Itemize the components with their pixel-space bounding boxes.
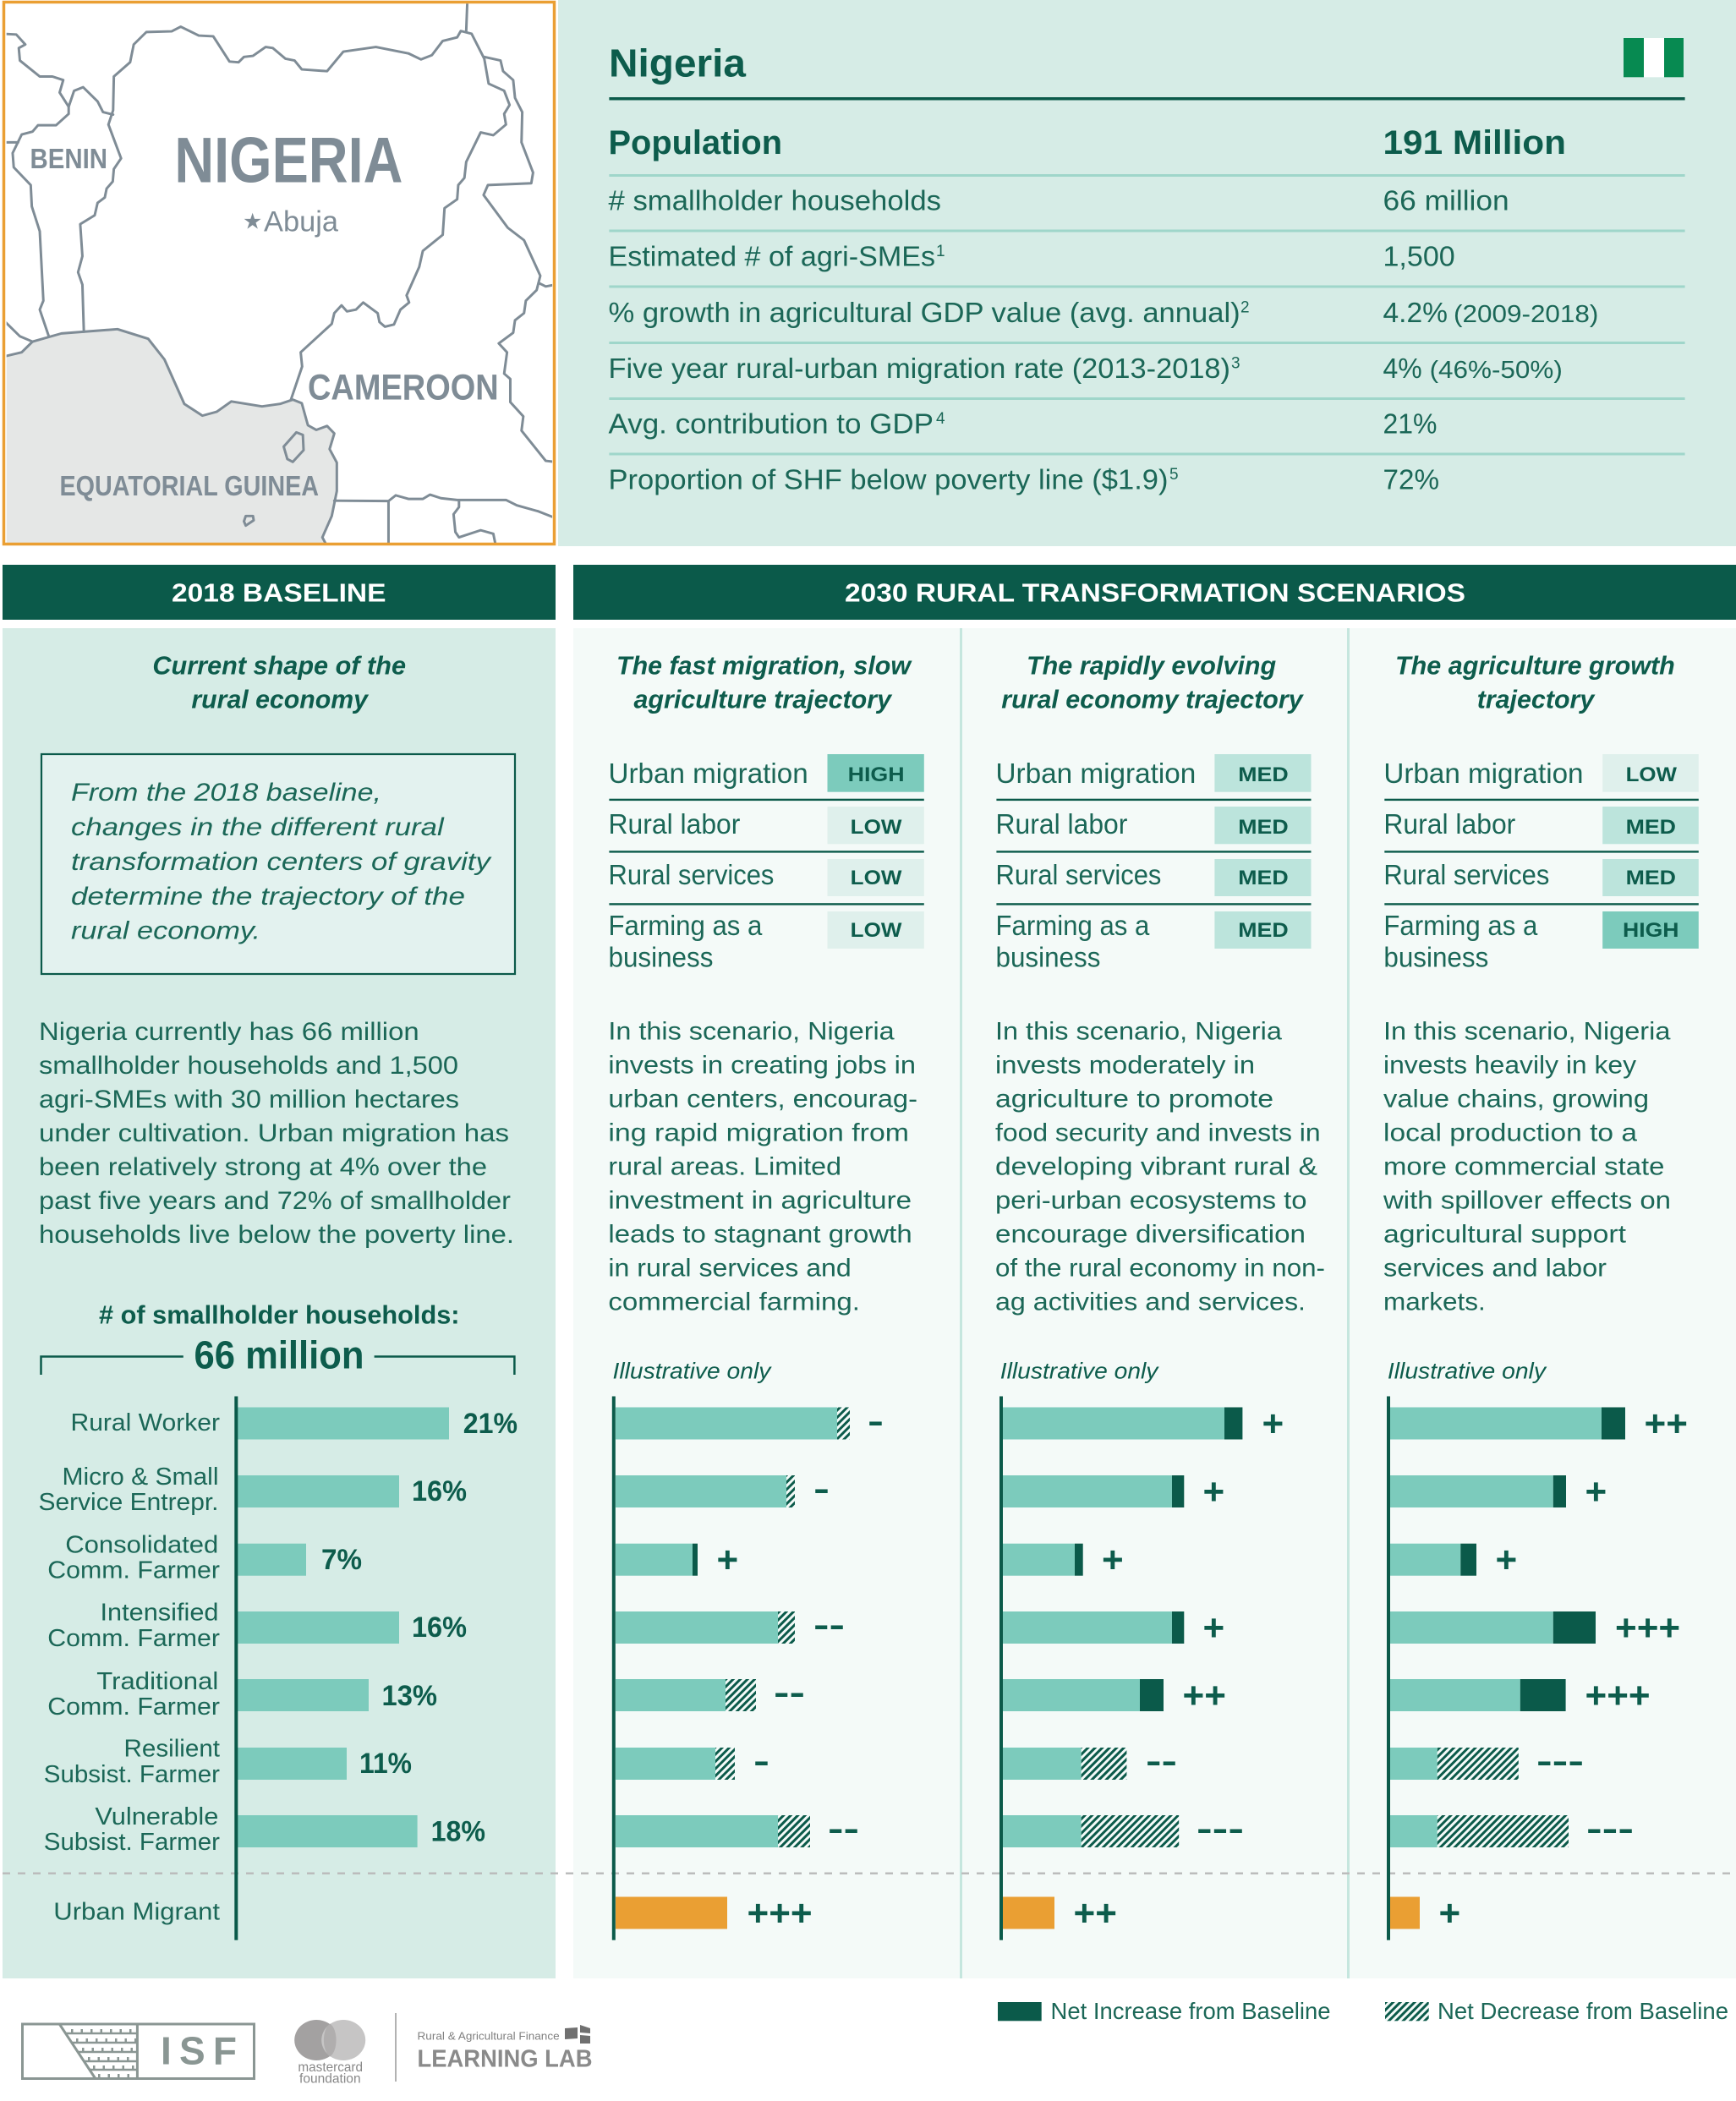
heading: scenario 3 (1395, 651, 1675, 714)
table: scenario 1 levels: business (609, 941, 713, 972)
text block: baseline description: under cultivation. Urban migration has (39, 1119, 509, 1147)
table: scenario 3 levels: Rural services (1383, 859, 1549, 890)
stat: agri-SMEs: Estimated # of agri-SMEs (609, 240, 935, 271)
table: scenario 2 levels: business (996, 941, 1100, 972)
bar chart: scenario 1: - (813, 1471, 830, 1507)
row: micro and small service entrepreneur (39, 1464, 467, 1516)
text block: scenario 2 description (995, 1017, 1325, 1316)
text block: scenario 3 description: invests heavily in key (1383, 1051, 1636, 1079)
row: rural worker: Rural Worker (71, 1409, 220, 1436)
bar chart: scenario 2: ++ (1074, 1892, 1117, 1934)
table: scenario 3 levels: Farming as a (1383, 910, 1538, 941)
row: rural worker: 21% (463, 1408, 518, 1440)
logo: Rural & Agricultural Finance Learning Lab (418, 2025, 592, 2072)
table: scenario 2 levels: MED (1238, 763, 1289, 786)
text block: scenario 1 description: investment in agriculture (608, 1186, 912, 1214)
stat: contribution to GDP: 4 (936, 410, 945, 428)
map label: Nigeria: NIGERIA (174, 125, 403, 196)
map label: Abuja with capital star: Abuja (264, 206, 338, 238)
header: 2030 scenarios (573, 565, 1736, 620)
row: traditional commercial farmer (47, 1668, 437, 1721)
axis: baseline chart (234, 1397, 238, 1940)
map label: Equatorial Guinea: EQUATORIAL GUINEA (59, 470, 319, 501)
note: illustrative only: Illustrative only (612, 1358, 772, 1383)
heading: scenario 1: agriculture trajectory (634, 685, 893, 714)
table: scenario 2 levels: Rural labor (996, 808, 1127, 840)
text block: scenario 2 description: In this scenario, Nigeria (995, 1017, 1282, 1045)
text block: scenario 3 description: markets. (1383, 1288, 1486, 1316)
stat: contribution to GDP (609, 408, 1438, 440)
bar chart: scenario 3: + (1439, 1892, 1460, 1934)
stat: agricultural GDP growth: 4.2% (1383, 297, 1448, 328)
panel: country statistics (558, 0, 1736, 546)
row: traditional commercial farmer: Comm. Farmer (47, 1693, 220, 1721)
bar chart: scenario 2: ++ (1182, 1675, 1226, 1716)
bar chart: scenario 3 (1390, 1403, 1688, 1934)
stat: agri-SMEs: 1,500 (1383, 240, 1455, 271)
table: scenario 1 levels (609, 754, 924, 972)
logo: Rural & Agricultural Finance Learning Lab: Rural & Agricultural Finance (418, 2030, 560, 2043)
table: scenario 3 levels: MED (1626, 867, 1676, 889)
row: urban migrant label: Urban Migrant (53, 1899, 220, 1926)
bar chart: scenario 2: + (1262, 1403, 1284, 1444)
text block: baseline description: agri-SMEs with 30 million hectares (39, 1086, 459, 1113)
table: scenario 1 levels: HIGH (848, 763, 905, 786)
bar chart: scenario 2 (1003, 1403, 1284, 1934)
row: consolidated commercial farmer: Comm. Farmer (47, 1557, 220, 1584)
text block: scenario 1 description (608, 1017, 917, 1316)
callout box: From the 2018 baseline, (71, 779, 381, 807)
scenario 3: agriculture growth (1383, 651, 1699, 1934)
stat: smallholder households (609, 184, 1509, 216)
bar chart: baseline shares (39, 1407, 518, 1926)
note: illustrative only: Illustrative only (1388, 1358, 1547, 1383)
text block: scenario 1 description: leads to stagnant growth (608, 1220, 912, 1248)
table: scenario 1 levels: Rural services (609, 859, 774, 890)
table: scenario 1 levels: Farming as a (609, 910, 763, 941)
text block: baseline description (39, 1018, 514, 1249)
logo: ISF (22, 2024, 254, 2078)
text block: scenario 1 description: In this scenario, Nigeria (608, 1017, 895, 1045)
bar chart: scenario 1: - (753, 1743, 769, 1779)
stat: smallholder households: 66 million (1383, 184, 1509, 216)
stat: agricultural GDP growth: (2009-2018) (1454, 301, 1598, 328)
text block: scenario 1 description: urban centers, encourag- (608, 1085, 917, 1113)
text block: scenario 3 description: with spillover effects on (1383, 1186, 1671, 1214)
table: scenario 1 levels: LOW (851, 919, 902, 942)
row: consolidated commercial farmer (47, 1532, 362, 1584)
text block: scenario 1 description: invests in creating jobs in (608, 1051, 916, 1079)
stat: agricultural GDP growth: 2 (1240, 299, 1250, 316)
callout box: transformation centers of gravity (71, 848, 492, 876)
bar chart: scenario 3: --- (1586, 1811, 1634, 1847)
table: scenario 1 levels: Rural labor (609, 808, 740, 840)
row: traditional commercial farmer: Traditional (96, 1668, 218, 1695)
callout box (41, 754, 515, 974)
heading: scenario 2: The rapidly evolving (1027, 651, 1276, 680)
text block: scenario 2 description: peri-urban ecosystems to (995, 1186, 1307, 1214)
table: scenario 3 levels: LOW (1626, 763, 1677, 786)
heading: current shape: rural economy (191, 685, 370, 714)
row: vulnerable subsistence farmer: 18% (431, 1816, 485, 1848)
text block: scenario 1 description: rural areas. Limited (608, 1152, 841, 1180)
stat: population: 191 Million (1383, 124, 1566, 161)
bar chart: scenario 3: ++ (1644, 1403, 1688, 1444)
table: scenario 2 levels (996, 754, 1311, 972)
logo: Mastercard Foundation: foundation (299, 2071, 361, 2086)
stat: rural-urban migration: Five year rural-urban migration rate (2013-2018) (609, 353, 1230, 384)
row: rural worker (71, 1407, 518, 1440)
logo: Mastercard Foundation: mastercard (298, 2060, 363, 2075)
text block: baseline description: smallholder households and 1,500 (39, 1052, 458, 1080)
stat: poverty line (609, 464, 1439, 495)
text block: scenario 3 description: local production to a (1383, 1119, 1637, 1146)
map label: Cameroon: CAMEROON (308, 368, 499, 408)
stat: population (609, 124, 1566, 161)
icon: Nigerian flag (1624, 38, 1684, 77)
text block: scenario 3 description: In this scenario, Nigeria (1383, 1017, 1671, 1045)
stat: contribution to GDP: Avg. contribution to GDP (609, 408, 934, 440)
row: intensified commercial farmer: Comm. Farmer (47, 1625, 220, 1652)
row: intensified commercial farmer (47, 1600, 467, 1652)
chart heading: smallholder households 66 million: # of smallholder households: (99, 1300, 460, 1329)
text block: scenario 3 description: services and labor (1383, 1254, 1607, 1282)
heading: scenario 3: The agriculture growth (1395, 651, 1675, 680)
row: resilient subsistence farmer (44, 1736, 412, 1788)
logo: ISF: ISF (161, 2029, 237, 2073)
bar chart: scenario 1: -- (813, 1608, 845, 1644)
table: scenario 3 levels: Urban migration (1383, 758, 1583, 789)
row: vulnerable subsistence farmer (44, 1803, 485, 1856)
text block: baseline description: households live below the poverty line. (39, 1221, 514, 1249)
text block: scenario 2 description: ag activities and services. (995, 1288, 1306, 1316)
text block: scenario 1 description: in rural services and (608, 1254, 852, 1282)
row: traditional commercial farmer: 13% (382, 1680, 437, 1712)
stat: agricultural GDP growth: % growth in agricultural GDP value (avg. annual) (609, 297, 1240, 328)
heading: scenario 1 (616, 651, 912, 714)
table: scenario 2 levels: MED (1238, 867, 1289, 889)
table: scenario 2 levels: MED (1238, 919, 1289, 942)
stat: agricultural GDP growth (609, 297, 1598, 328)
text block: baseline description: Nigeria currently has 66 million (39, 1018, 419, 1046)
table: scenario 1 levels: LOW (851, 816, 902, 839)
heading: Nigeria: Nigeria (609, 41, 746, 85)
row: micro and small service entrepreneur: Service Entrepr. (39, 1489, 218, 1516)
text block: scenario 2 description: food security and invests in (995, 1119, 1321, 1146)
stat: agri-SMEs (609, 240, 1455, 271)
row: micro and small service entrepreneur: 16% (412, 1475, 467, 1507)
row: resilient subsistence farmer: 11% (359, 1748, 412, 1780)
bar chart: scenario 2: + (1102, 1540, 1124, 1581)
text block: scenario 2 description: invests moderately in (995, 1051, 1255, 1079)
logo: Mastercard Foundation (294, 2020, 365, 2086)
heading: current shape: Current shape of the (152, 651, 406, 680)
heading: scenario 1: The fast migration, slow (616, 651, 912, 680)
text block: scenario 2 description: developing vibrant rural & (995, 1152, 1317, 1180)
heading: scenario 3: trajectory (1477, 685, 1596, 714)
header: 2030 scenarios: 2030 RURAL TRANSFORMATION SCENARIOS (845, 578, 1465, 607)
legend: net decrease: Net Decrease from Baseline (1438, 1998, 1728, 2024)
map label: Abuja with capital star: ★ (243, 209, 262, 234)
scenario 2: rapidly evolving rural economy (995, 651, 1325, 1934)
table: scenario 2 levels: Rural services (996, 859, 1161, 890)
axis: scenario 2 chart (999, 1397, 1003, 1940)
table: scenario 1 levels: Urban migration (609, 758, 808, 789)
legend: net increase: Net Increase from Baseline (1050, 1998, 1331, 2024)
stat: rural-urban migration: 4% (1383, 353, 1422, 384)
row: consolidated commercial farmer: Consolidated (65, 1532, 218, 1559)
chart heading: smallholder households 66 million: 66 million (194, 1332, 364, 1376)
logo: Rural & Agricultural Finance Learning Lab: LEARNING LAB (418, 2045, 592, 2072)
scenario 1: fast migration, slow agriculture (608, 651, 924, 1934)
bar chart: scenario 3: + (1585, 1471, 1607, 1513)
axis: scenario 1 chart (612, 1397, 616, 1940)
bar chart: scenario 3: + (1495, 1540, 1517, 1581)
table: scenario 2 levels: MED (1238, 816, 1289, 839)
table: scenario 3 levels: business (1383, 941, 1488, 972)
bar chart: scenario 2: + (1202, 1471, 1224, 1513)
bar chart: scenario 2: + (1202, 1607, 1224, 1649)
bar chart: scenario 1 (616, 1403, 884, 1934)
text block: scenario 2 description: of the rural economy in non- (995, 1254, 1325, 1282)
text block: baseline description: been relatively strong at 4% over the (39, 1153, 487, 1181)
bar chart: scenario 1: + (717, 1540, 738, 1581)
bar chart: scenario 3: +++ (1615, 1607, 1680, 1649)
panel: baseline column (3, 628, 556, 1978)
stat: population: Population (609, 124, 782, 161)
table: scenario 3 levels: HIGH (1623, 919, 1679, 942)
axis: scenario 3 chart (1387, 1397, 1390, 1940)
panel: scenario columns (573, 628, 1736, 1978)
row: consolidated commercial farmer: 7% (321, 1544, 362, 1576)
row: micro and small service entrepreneur: Micro & Small (63, 1464, 218, 1491)
stat: smallholder households: # smallholder households (609, 184, 941, 216)
note: illustrative only: Illustrative only (1000, 1358, 1159, 1383)
text block: scenario 1 description: ing rapid migration from (608, 1119, 909, 1146)
table: scenario 1 levels: LOW (851, 867, 902, 889)
header: 2018 baseline: 2018 BASELINE (172, 578, 386, 607)
stat: rural-urban migration: 3 (1231, 355, 1240, 372)
callout box: rural economy. (71, 917, 260, 945)
stat: rural-urban migration: (46%-50%) (1430, 357, 1563, 384)
text block: scenario 3 description (1383, 1017, 1671, 1316)
text block: scenario 3 description: agricultural support (1383, 1220, 1627, 1248)
stat: contribution to GDP: 21% (1383, 408, 1438, 440)
bar chart: scenario 1: +++ (748, 1892, 813, 1934)
table: scenario 3 levels (1383, 754, 1699, 972)
row: vulnerable subsistence farmer: Subsist. Farmer (44, 1829, 220, 1856)
text block: scenario 3 description: value chains, growing (1383, 1085, 1649, 1113)
text block: scenario 2 description: encourage diversification (995, 1220, 1306, 1248)
bar chart: scenario 1: -- (828, 1811, 859, 1847)
heading: current shape (152, 651, 406, 714)
text block: scenario 2 description: agriculture to promote (995, 1085, 1273, 1113)
bar chart: scenario 2: --- (1197, 1811, 1244, 1847)
header: 2018 baseline (3, 565, 556, 620)
table: scenario 2 levels: Urban migration (996, 758, 1196, 789)
chart heading: smallholder households 66 million (41, 1300, 514, 1376)
bar chart: scenario 1: -- (774, 1676, 805, 1711)
text block: scenario 3 description: more commercial state (1383, 1152, 1664, 1180)
bar chart: scenario 2: -- (1146, 1743, 1177, 1779)
stat: agri-SMEs: 1 (936, 243, 945, 260)
stat: poverty line: 72% (1383, 464, 1439, 495)
stat: poverty line: 5 (1169, 466, 1179, 484)
map label: Benin: BENIN (30, 143, 107, 174)
heading: scenario 2: rural economy trajectory (1001, 685, 1304, 714)
bar chart: scenario 3: --- (1536, 1743, 1584, 1779)
row: vulnerable subsistence farmer: Vulnerable (95, 1803, 218, 1830)
bar chart: scenario 3: +++ (1585, 1675, 1651, 1716)
table: scenario 2 levels: Farming as a (996, 910, 1150, 941)
row: resilient subsistence farmer: Resilient (123, 1736, 220, 1763)
stat: rural-urban migration (609, 353, 1563, 384)
bar chart: scenario 1: - (868, 1403, 884, 1439)
table: scenario 3 levels: Rural labor (1383, 808, 1515, 840)
text block: baseline description: past five years and 72% of smallholder (39, 1187, 511, 1215)
heading: scenario 2 (1001, 651, 1304, 714)
row: intensified commercial farmer: Intensified (100, 1600, 218, 1627)
row: resilient subsistence farmer: Subsist. Farmer (44, 1761, 220, 1788)
row: intensified commercial farmer: 16% (412, 1611, 467, 1644)
table: scenario 3 levels: MED (1626, 816, 1676, 839)
map panel: Nigeria and neighbours (3, 2, 555, 546)
callout box: changes in the different rural (71, 813, 445, 841)
stat: poverty line: Proportion of SHF below poverty line ($1.9) (609, 464, 1169, 495)
callout box: determine the trajectory of the (71, 883, 465, 911)
text block: scenario 1 description: commercial farming. (608, 1288, 860, 1316)
